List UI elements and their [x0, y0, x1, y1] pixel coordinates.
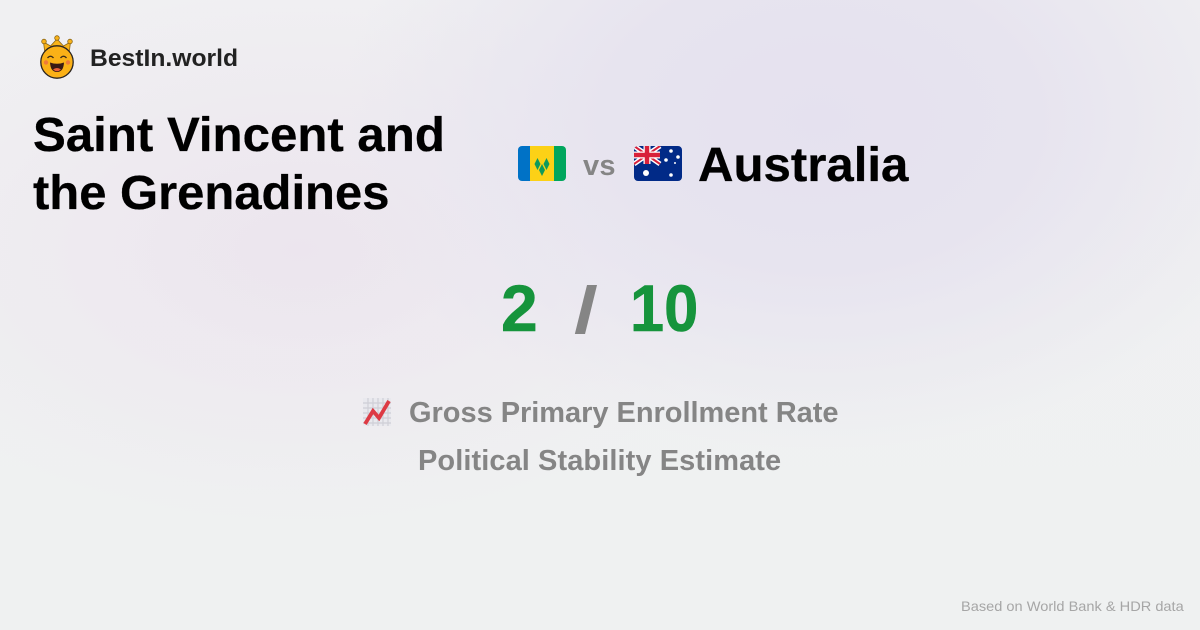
icon: Saint Vincent flag	[518, 146, 566, 181]
metric: first label: Gross Primary Enrollment Rate	[409, 397, 838, 429]
icon: crowned smiling face	[40, 35, 74, 79]
title: first country: Saint Vincent and	[33, 109, 445, 162]
footnote: Based on World Bank & HDR data	[961, 598, 1184, 614]
icon: chart with downward trend	[363, 398, 391, 426]
separator: /	[574, 273, 598, 347]
brand name: BestIn.world	[90, 45, 238, 72]
vs label: vs	[583, 150, 616, 182]
logo	[40, 35, 238, 79]
title: first country: the Grenadines	[33, 167, 389, 220]
icon: Australia flag	[634, 146, 682, 181]
value: left: 2	[501, 271, 538, 345]
metric: second label: Political Stability Estimate	[418, 445, 781, 477]
title: second country: Australia	[698, 139, 908, 192]
title: first country	[33, 109, 445, 220]
score values	[501, 271, 698, 347]
value: right: 10	[630, 271, 698, 345]
